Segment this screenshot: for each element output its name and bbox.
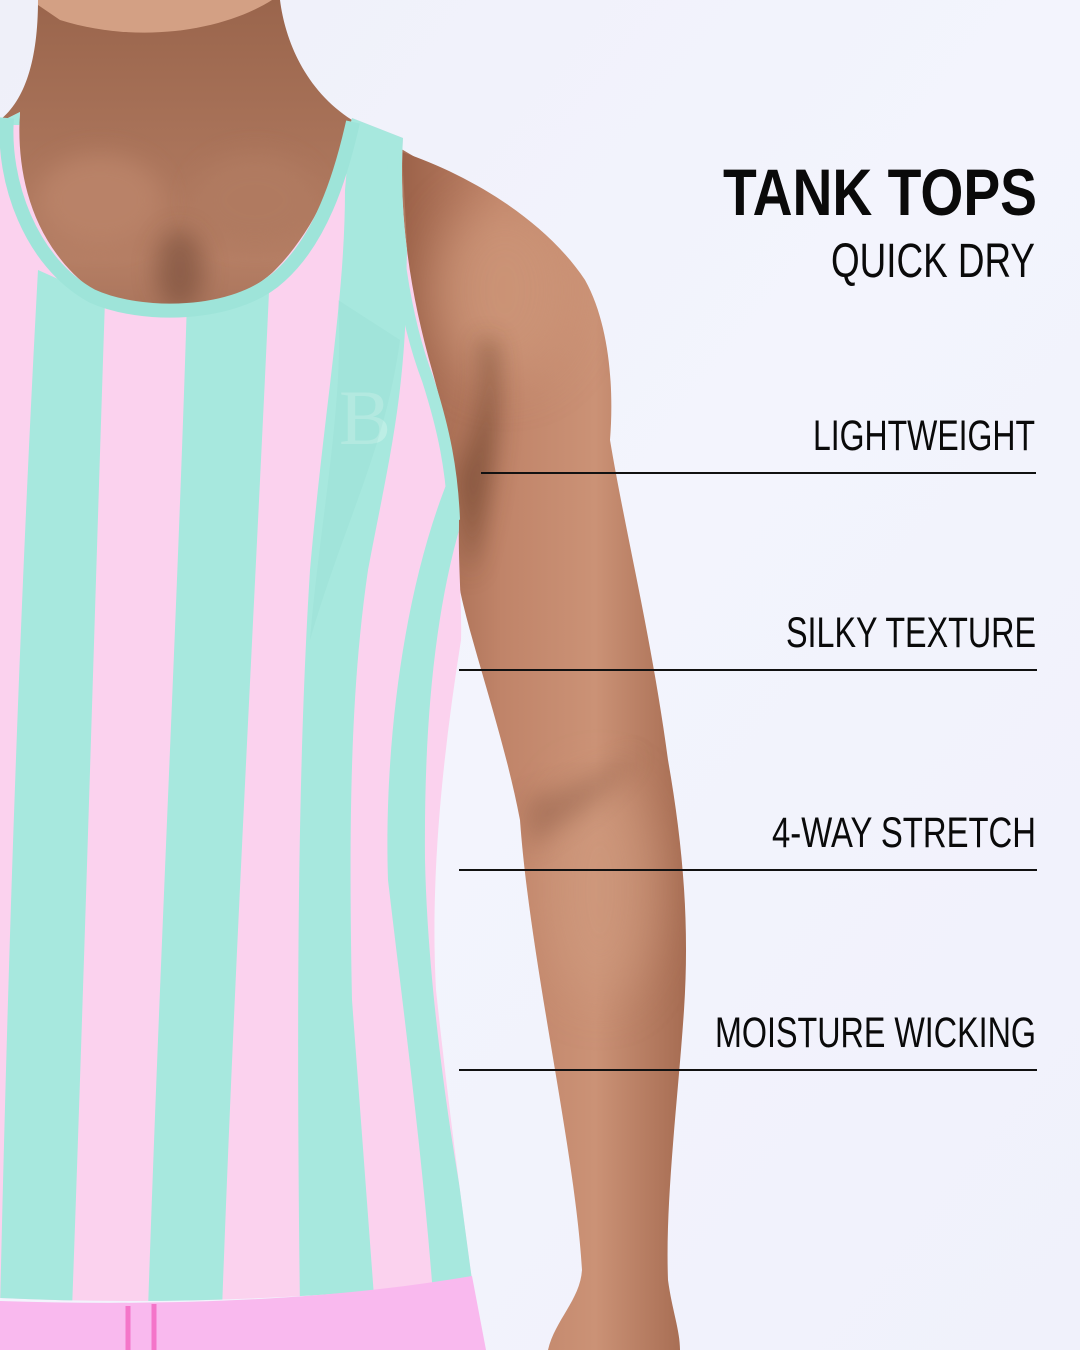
drawstring: [128, 1304, 154, 1350]
chest highlight: [38, 155, 162, 245]
forearm highlight: [603, 806, 664, 974]
chest logo: B: [339, 374, 391, 461]
shoulder light: [435, 200, 575, 380]
armpit crease shadow: [456, 340, 498, 580]
shoulder and arm: [402, 152, 686, 1350]
neck binding: [6, 118, 353, 311]
illustration: torso and arm: [0, 0, 686, 1350]
mint stripes: [0, 100, 480, 1310]
arm shading clipped to arm: [435, 200, 655, 1000]
chest highlight right: [195, 155, 315, 245]
armhole binding: [393, 140, 454, 520]
sternum shadow: [156, 230, 204, 310]
shorts: [0, 1276, 486, 1350]
tank top: [0, 100, 500, 1310]
elbow shadow: [521, 764, 622, 844]
pink base: [0, 100, 500, 1310]
neck and chest skin: [0, 0, 470, 520]
chin: [38, 0, 272, 33]
fabric fold shadow: [310, 300, 400, 640]
